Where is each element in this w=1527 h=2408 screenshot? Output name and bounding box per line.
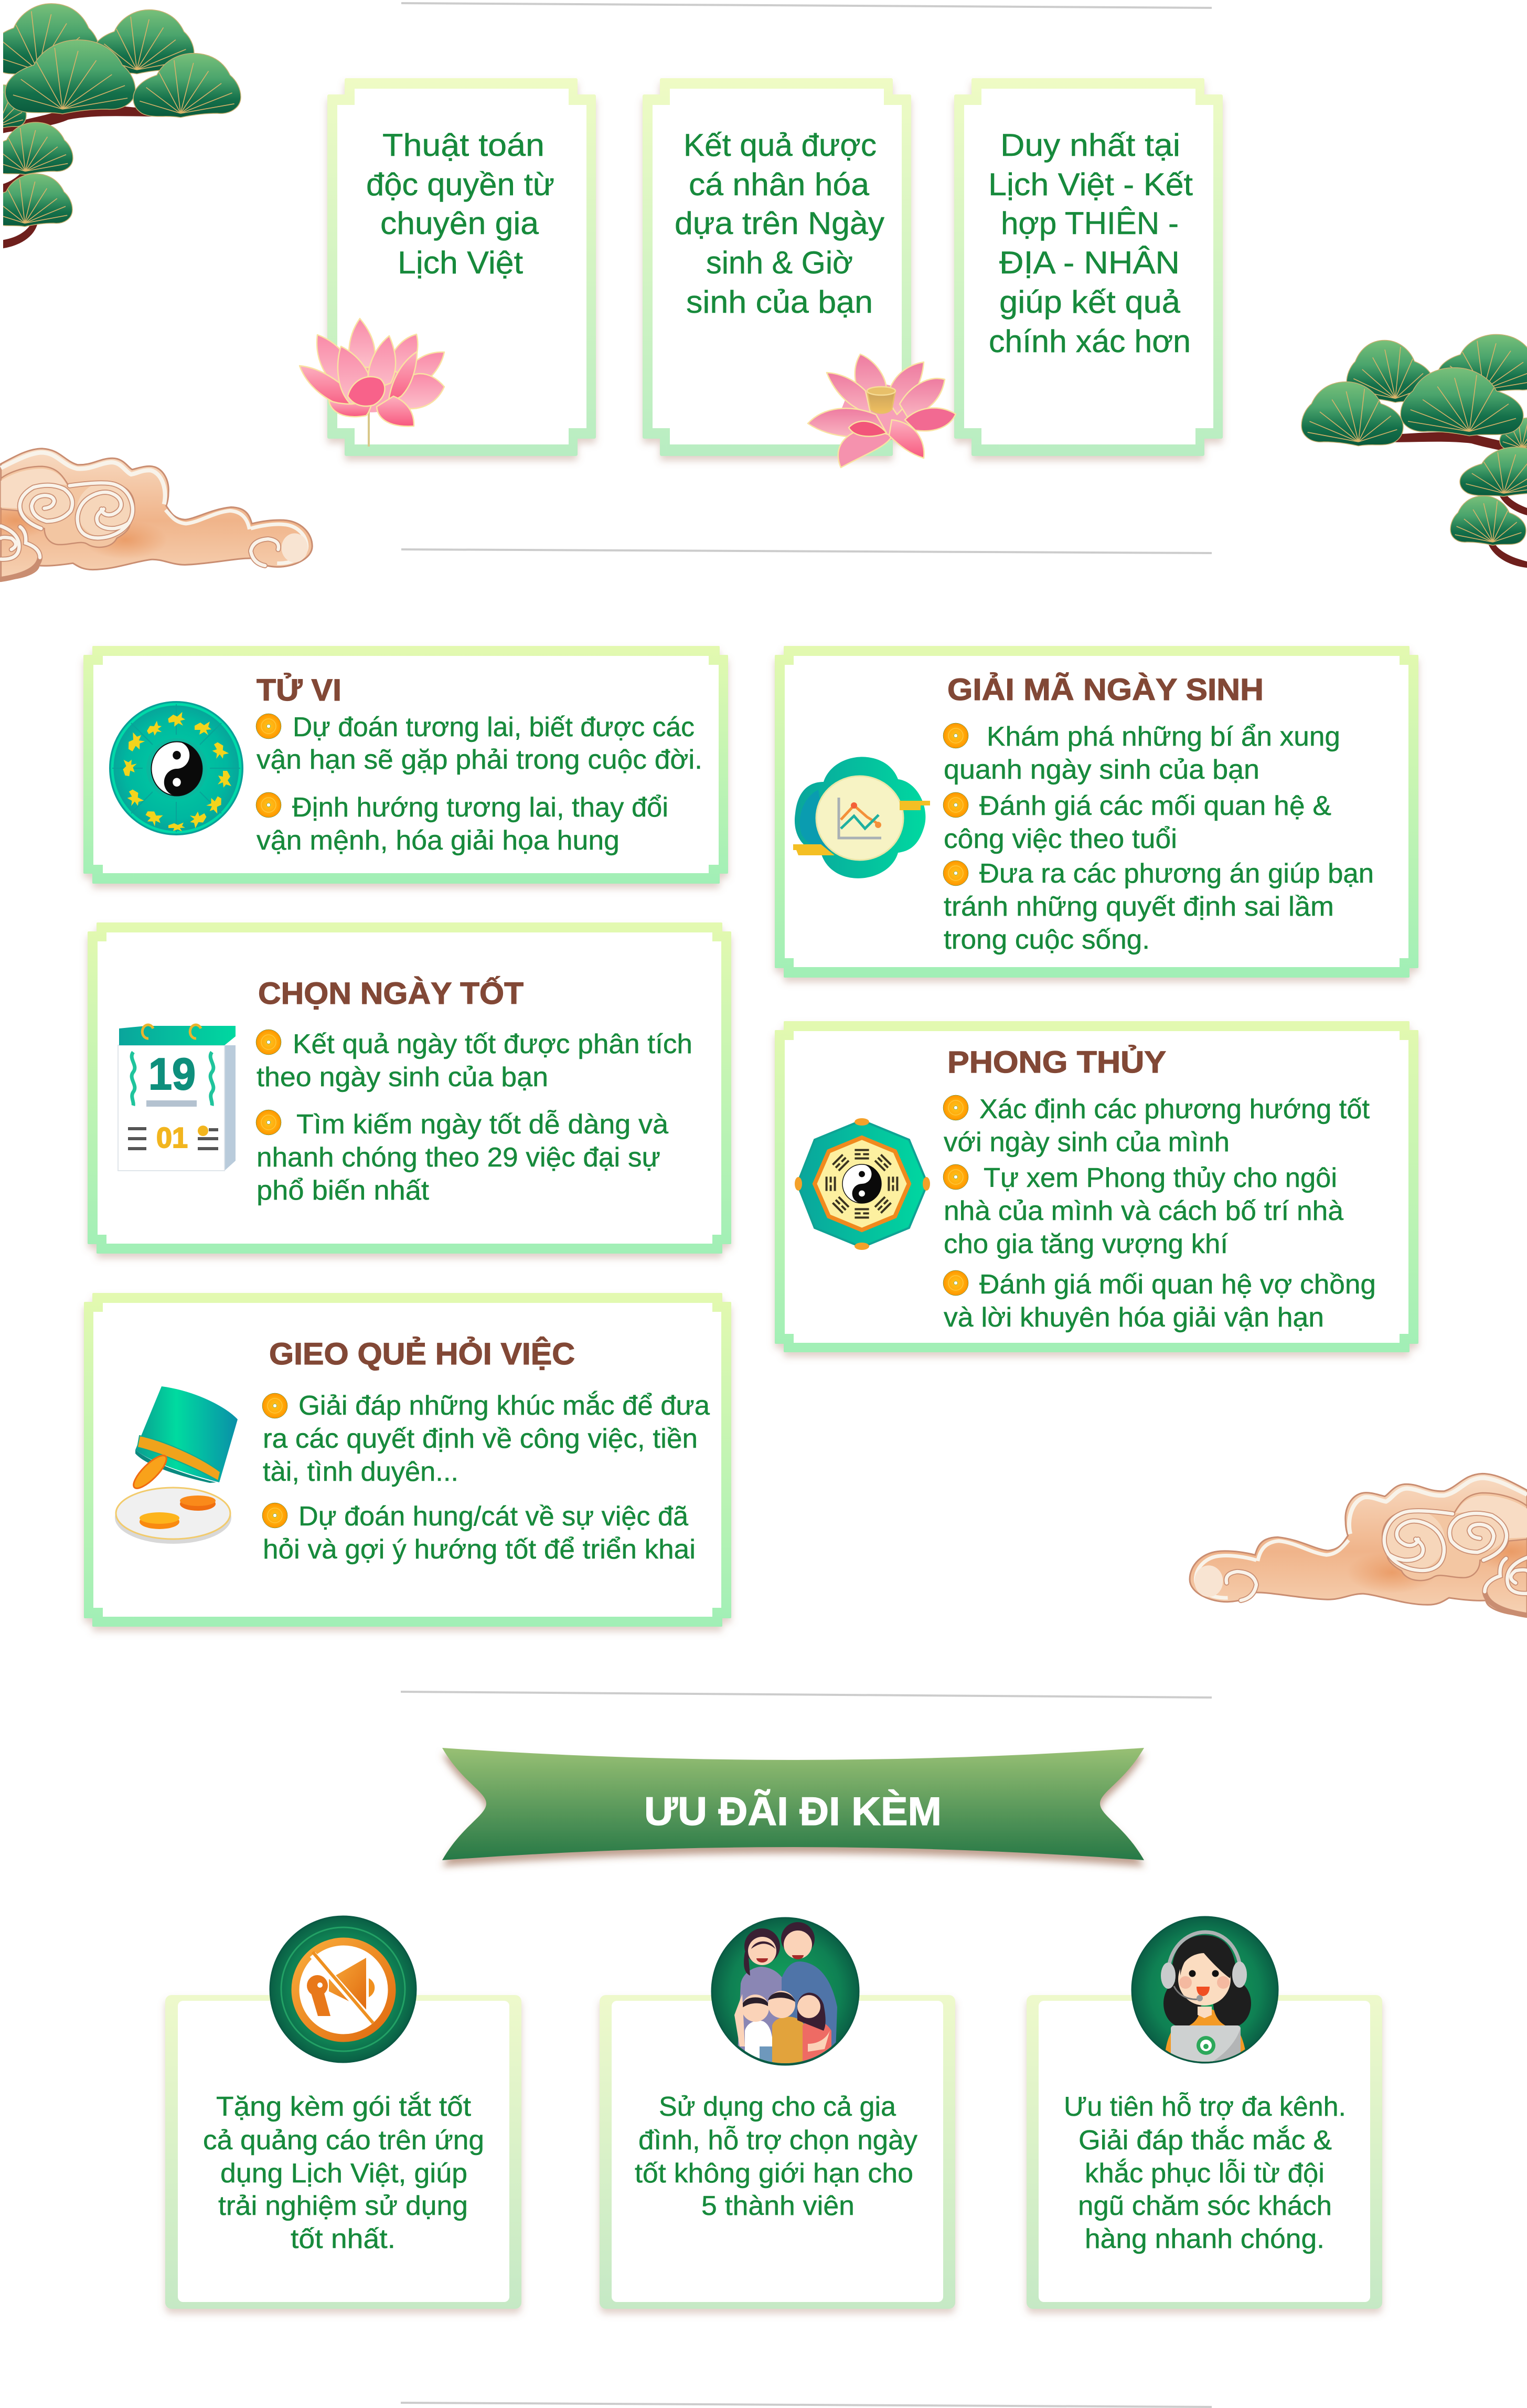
text: Gieo quẻ bullets: ra các quyết định về công việc, tiền: [263, 1424, 698, 1454]
text: no ads: trải nghiệm sử dụng: [218, 2191, 468, 2221]
illustration: cloud left: [0, 449, 312, 579]
heading: Chọn ngày tốt: CHỌN NGÀY TỐT: [258, 977, 524, 1011]
text: family use: tốt không giới hạn cho: [635, 2158, 913, 2189]
text: Giải mã bullets: trong cuộc sống.: [944, 925, 1150, 955]
text: priority support: ngũ chăm sóc khách: [1078, 2191, 1332, 2221]
text: Giải mã bullets: Đánh giá các mối quan hệ &: [979, 791, 1331, 821]
text: Tử Vi bullets: Định hướng tương lai, thay đổi: [292, 792, 668, 823]
text: personalised results: sinh & Giờ: [706, 245, 853, 280]
text: Phong thủy bullets: cho gia tăng vượng khí: [944, 1229, 1229, 1259]
illustration: cloud right: [1190, 1473, 1527, 1615]
text: priority support: Ưu tiên hỗ trợ đa kênh.: [1064, 2092, 1346, 2122]
illustration: pink lotus left: [300, 319, 444, 447]
heading: Phong thủy: PHONG THỦY: [947, 1045, 1166, 1079]
text: Giải mã bullets: tránh những quyết định sai lầm: [944, 892, 1334, 922]
panel: personalised results card: [644, 80, 910, 454]
text: unique combination: giúp kết quả: [999, 284, 1181, 320]
icon: family: [712, 1918, 859, 2065]
panel: Giải mã ngày sinh: [776, 647, 1417, 977]
text: Phong thủy bullets: và lời khuyên hóa giải vận hạn: [944, 1302, 1324, 1333]
text: unique combination: hợp THIÊN -: [1001, 206, 1179, 241]
illustration: pine branch right: [1301, 334, 1527, 568]
icon: divination cup and coins: [115, 1386, 238, 1544]
text: priority support: Giải đáp thắc mắc &: [1078, 2125, 1332, 2156]
text: no ads: Tặng kèm gói tắt tốt: [216, 2092, 472, 2122]
text: algorithm: [366, 128, 554, 280]
illustration: pine branch top left: [0, 4, 241, 249]
icon: muted megaphone: [270, 1916, 416, 2062]
heading: Giải mã ngày sinh: GIẢI MÃ NGÀY SINH: [947, 673, 1264, 707]
text: Gieo quẻ bullets: tài, tình duyên...: [263, 1457, 458, 1487]
text: Phong thủy bullets: với ngày sinh của mình: [944, 1127, 1230, 1158]
text: Tử Vi bullets: vận mệnh, hóa giải họa hung: [257, 825, 620, 856]
heading: Tử Vi: TỬ VI: [257, 673, 341, 707]
text: Giải mã bullets: Đưa ra các phương án giúp bạn: [979, 858, 1374, 889]
text: no ads: cả quảng cáo trên ứng: [203, 2125, 484, 2156]
text: family use: 5 thành viên: [701, 2191, 855, 2221]
text: Gieo quẻ bullets: Giải đáp những khúc mắc để đưa: [298, 1391, 710, 1421]
text: Phong thủy bullets: Xác định các phương hướng tốt: [979, 1094, 1370, 1125]
banner: offers heading: [442, 1748, 1144, 1860]
heading: Gieo quẻ hỏi việc: GIEO QUẺ HỎI VIỆC: [269, 1337, 575, 1371]
text: no ads: [203, 2092, 484, 2254]
text: unique combination: Duy nhất tại: [1000, 128, 1180, 163]
icon: calendar: 01: [156, 1121, 188, 1154]
text: personalised results: sinh của bạn: [686, 284, 873, 320]
text: no ads: dụng Lịch Việt, giúp: [220, 2158, 467, 2189]
icon: support agent: [1132, 1917, 1278, 2067]
text: priority support: hàng nhanh chóng.: [1085, 2224, 1325, 2254]
text: Phong thủy bullets: [943, 1094, 1376, 1333]
panel: no ads: [165, 1916, 521, 2309]
icon: calendar: [118, 1025, 236, 1171]
text: personalised results: Kết quả được: [684, 128, 877, 163]
text: algorithm: Thuật toán: [382, 128, 544, 163]
text: unique combination: Lịch Việt - Kết: [988, 167, 1193, 202]
icon: chart in teal cloud: [793, 757, 930, 878]
text: priority support: khắc phục lỗi từ đội: [1085, 2158, 1325, 2189]
text: personalised results: dựa trên Ngày: [675, 206, 884, 241]
text: priority support: [1064, 2092, 1346, 2254]
panel: unique combination card: [956, 80, 1221, 454]
text: Giải mã bullets: quanh ngày sinh của bạn: [944, 755, 1259, 785]
text: Chọn ngày tốt bullets: [256, 1029, 692, 1206]
panel: Tử Vi: [84, 647, 727, 883]
text: Tử Vi bullets: vận hạn sẽ gặp phải trong cuộc đời.: [257, 745, 702, 775]
text: Giải mã bullets: công việc theo tuổi: [944, 824, 1177, 854]
text: family use: đình, hỗ trợ chọn ngày: [638, 2125, 917, 2156]
text: Chọn ngày tốt bullets: theo ngày sinh của bạn: [257, 1062, 548, 1092]
panel: Phong thủy: [776, 1022, 1417, 1351]
panel: algorithm card: [329, 80, 594, 454]
text: Chọn ngày tốt bullets: Kết quả ngày tốt được phân tích: [293, 1029, 692, 1059]
panel: Gieo quẻ hỏi việc: [85, 1294, 730, 1626]
text: algorithm: độc quyền từ: [366, 167, 554, 202]
text: algorithm: Lịch Việt: [398, 245, 523, 280]
text: Chọn ngày tốt bullets: nhanh chóng theo 29 việc đại sự: [257, 1142, 660, 1173]
text: Tử Vi bullets: [256, 712, 702, 856]
text: unique combination: ĐỊA - NHÂN: [999, 245, 1180, 280]
text: unique combination: chính xác hơn: [989, 324, 1191, 359]
text: Tử Vi bullets: Dự đoán tương lai, biết được các: [293, 712, 695, 742]
text: unique combination: [988, 128, 1193, 359]
divider: top: [401, 3, 1212, 8]
text: algorithm: chuyên gia: [380, 206, 539, 241]
banner: offers heading: ƯU ĐÃI ĐI KÈM: [644, 1789, 942, 1834]
panel: priority support: [1027, 1917, 1382, 2309]
divider: middle: [401, 549, 1212, 553]
text: Chọn ngày tốt bullets: phổ biến nhất: [257, 1175, 430, 1206]
text: personalised results: cá nhân hóa: [689, 167, 870, 202]
text: Giải mã bullets: [943, 722, 1374, 955]
text: Gieo quẻ bullets: [262, 1391, 710, 1565]
text: Phong thủy bullets: Tự xem Phong thủy cho ngôi: [984, 1163, 1337, 1193]
icon: calendar: 19: [148, 1049, 196, 1099]
panel: family use: [600, 1918, 955, 2309]
text: Phong thủy bullets: nhà của mình và cách bố trí nhà: [944, 1196, 1343, 1226]
text: Gieo quẻ bullets: Dự đoán hung/cát về sự việc đã: [298, 1501, 688, 1532]
text: family use: [635, 2092, 917, 2221]
panel: Chọn ngày tốt: [89, 924, 730, 1253]
illustration: pink lotus right: [808, 354, 956, 468]
divider: above offers: [401, 1692, 1212, 1698]
text: Giải mã bullets: Khám phá những bí ẩn xung: [987, 722, 1340, 752]
text: no ads: tốt nhất.: [291, 2224, 396, 2254]
text: Phong thủy bullets: Đánh giá mối quan hệ vợ chồng: [979, 1269, 1376, 1300]
divider: bottom: [401, 2403, 1212, 2407]
icon: zodiac wheel: [109, 701, 243, 835]
text: Chọn ngày tốt bullets: Tìm kiếm ngày tốt dễ dàng và: [296, 1109, 668, 1140]
text: Gieo quẻ bullets: hỏi và gợi ý hướng tốt để triển khai: [263, 1534, 696, 1565]
text: personalised results: [675, 128, 884, 320]
text: family use: Sử dụng cho cả gia: [659, 2092, 896, 2122]
icon: bagua mirror: [795, 1118, 930, 1250]
